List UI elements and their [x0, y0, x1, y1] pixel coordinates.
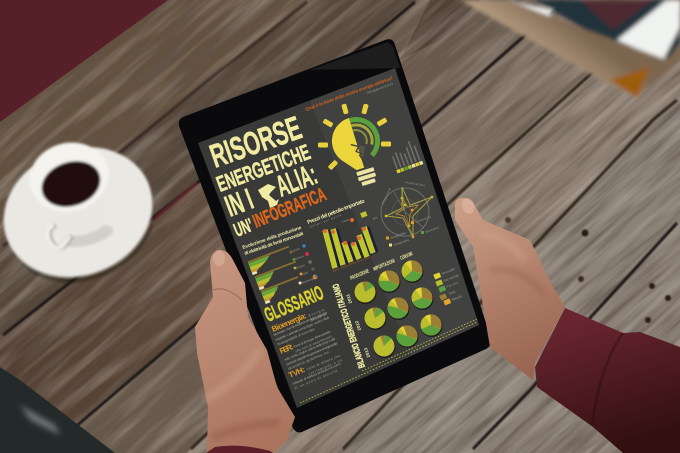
chart legend [290, 244, 317, 285]
entry: Bioenergia: biomasse, cioè da sostanze di origine organica [273, 311, 328, 337]
mini chart 3 [260, 276, 303, 304]
glossary: GLOSSARIO [261, 282, 327, 327]
chart legend: Eolica [295, 254, 304, 261]
small bar chart top right [388, 139, 423, 173]
tablet screen [198, 68, 479, 408]
question heading: Qual è la fonte della nostra energia elettrica? [305, 75, 394, 113]
legend: Costo [341, 217, 350, 224]
radar legend: Energia eolica [393, 238, 410, 247]
price markers [323, 227, 366, 246]
row years: 2012 [354, 320, 362, 331]
pie: consumi 3 [418, 312, 444, 338]
row years [345, 293, 371, 358]
energy balance pies [330, 251, 463, 369]
chart legend: Bioenergia [301, 276, 316, 285]
mini chart 1 [247, 246, 294, 275]
pie: produzione 3 [371, 333, 397, 359]
pie legend: Petrolio [446, 281, 459, 289]
energy balance pies: BILANCIO ENERGETICO ITALIANO [330, 283, 367, 369]
infographic title: ENERGETICHE [213, 139, 314, 197]
entry: FER: sole, vento, acqua, calore della terra e altri [284, 337, 336, 362]
oil price chart: 2007 2008 2009 2010 2011 [332, 254, 373, 273]
tablet body [179, 39, 491, 432]
icon: light bulb [318, 104, 391, 191]
radar legend: Biomasse [425, 225, 440, 234]
entry: Bioenergia [270, 308, 330, 346]
entry: Bioenergia: prodotta da [310, 312, 327, 322]
row years: 2011 [345, 293, 353, 304]
coffee cup and saucer [0, 125, 172, 303]
book stack top right [460, 0, 680, 98]
glossary [261, 282, 343, 390]
entry: FER: che non si esauriscono: [295, 334, 333, 353]
bars [325, 227, 373, 268]
pie legend [433, 267, 463, 305]
pie legend: Rinnovabili [441, 267, 456, 276]
bars shadow [328, 227, 376, 268]
renewables evolution chart: Evoluzione della produzione [242, 225, 303, 251]
entry: FER [278, 330, 338, 371]
infographic title: UN’ [231, 215, 256, 242]
entry: TVH [287, 354, 343, 390]
entry: TVH: TVH: [287, 365, 306, 380]
entry: FER: idroelettrica, geotermica, ecc. [287, 350, 330, 371]
entry: TVH: unità di misura che [306, 354, 341, 371]
renewables evolution chart: di elettricità da fonti rinnovabili [244, 231, 304, 257]
entry: FER: processi naturali che generano energia pulita [286, 341, 338, 366]
infographic title: INFOGRAFICA [250, 184, 329, 233]
pie: produzione 1 [352, 279, 378, 305]
mini chart 2 [254, 261, 301, 290]
question heading: Dati aggiornati al 2012 [366, 81, 394, 95]
pie legend: Gas naturale [443, 273, 460, 283]
infographic title: RISORSE [205, 109, 306, 175]
entry: TVH: corrisponde a un [308, 358, 343, 376]
entry: Bioenergia: vegetale o animale come legno, scarti e rifiuti [275, 315, 330, 342]
pie legend: Elettricità [451, 294, 463, 302]
entry: Bioenergia: Energia [308, 308, 325, 318]
oil price chart [307, 198, 376, 273]
infographic title: ALIA: [272, 158, 322, 204]
column headings [349, 251, 414, 282]
radar chart: Idro [372, 215, 379, 221]
renewables evolution chart [242, 225, 317, 304]
pie: importazioni 1 [376, 268, 402, 294]
left hand [195, 250, 295, 453]
dark object bottom left [0, 367, 115, 453]
infographic title: IN I [221, 183, 258, 224]
radar chart [372, 180, 440, 247]
entry: TVH: di un anno di attività [294, 369, 338, 390]
oil price chart: Prezzi del petrolio importato [307, 198, 366, 226]
radar legend: Energia solare [390, 231, 407, 240]
entry: Bioenergia: biodegradabili di vario tipo [277, 327, 315, 346]
chart legend: Geo [302, 270, 309, 276]
column headings: IMPORTAZIONI [372, 258, 396, 273]
screen glare [310, 68, 479, 356]
radar chart: Importazioni [405, 180, 426, 188]
column headings: PRODUZIONE [349, 268, 370, 282]
pie: consumi 2 [409, 285, 435, 311]
infographic title [205, 109, 329, 242]
dotted footer lines [300, 319, 477, 403]
maroon carpet corner [0, 0, 168, 122]
right hand [455, 196, 565, 380]
pie: importazioni 3 [394, 323, 420, 349]
right sleeve [535, 308, 680, 453]
entry: FER: Fonti di Energia Rinnovabile [293, 330, 331, 349]
radar legend: Geotermica [415, 215, 432, 224]
entry: FER: FER: [278, 342, 295, 356]
row years: 2013 [363, 347, 371, 358]
entry: Bioenergia: Bioenergia: [270, 311, 308, 334]
radar chart: Produzione [381, 187, 392, 205]
entry: TVH: miliardo di wattora prodotti nel corso [292, 362, 341, 386]
radar legend [386, 215, 440, 247]
pie: produzione 2 [362, 305, 388, 331]
oil price chart: Dollari per barile [309, 213, 342, 229]
pie: consumi 1 [399, 258, 425, 284]
pie: importazioni 2 [385, 295, 411, 321]
pie legend: Solidi [448, 289, 456, 296]
pie shadows [354, 261, 442, 358]
column headings: CONSUMI [399, 251, 414, 262]
chart legend: Idrica [292, 246, 301, 253]
left sleeve cuff [206, 446, 273, 453]
chart legend: Solare [296, 263, 306, 270]
